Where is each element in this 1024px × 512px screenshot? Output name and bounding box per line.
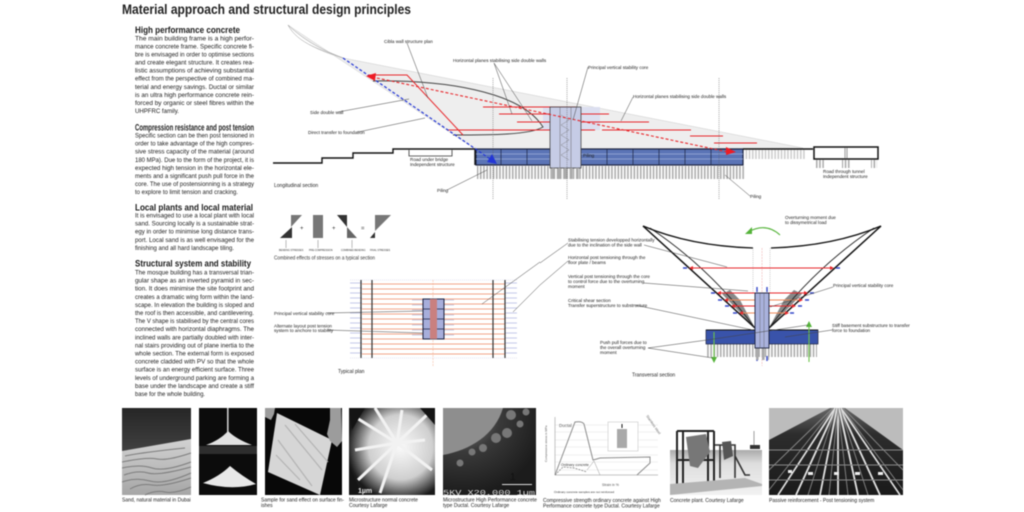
transversal labels: to control force due to the overturning bbox=[568, 279, 645, 284]
basement bbox=[476, 149, 743, 165]
red arrows bbox=[689, 266, 834, 315]
plan core bbox=[423, 299, 444, 339]
operators: + bbox=[332, 226, 336, 232]
bending stress diagram bbox=[280, 227, 292, 238]
photo: concrete plant bbox=[670, 408, 762, 495]
text block: local plants: sand. Sourcing locally is a sustainable strat- bbox=[135, 221, 254, 228]
heading: high performance concrete: High performance concrete bbox=[135, 25, 240, 35]
inner grey wall fill bbox=[722, 290, 802, 328]
orange post tension lines bbox=[362, 284, 505, 354]
transversal labels: Principal vertical stability core bbox=[833, 283, 894, 288]
ordinary curve bbox=[555, 467, 587, 475]
operators: + bbox=[300, 226, 304, 232]
text block: local plants: It is envisaged to use a local plant with local bbox=[135, 212, 254, 220]
plan labels: system to anchore to stability bbox=[274, 328, 334, 333]
caption: ductal: type Ductal. Courtesy Lafarge bbox=[443, 503, 509, 509]
blue tendons bbox=[350, 283, 517, 353]
caption: strength: Performance concrete type Ductal. Courtesy Lafarge bbox=[543, 504, 660, 510]
text block: high performance concrete: and create elegant structure. It creates rea- bbox=[135, 60, 254, 67]
caption: sand sample bbox=[261, 498, 344, 509]
text block: structural system: tion. It does minimise the site footprint and bbox=[135, 286, 255, 293]
transversal labels: moment bbox=[600, 350, 617, 355]
core bbox=[755, 293, 769, 348]
text block: compression resistance: expected high tension in the horizontal ele- bbox=[135, 165, 254, 172]
caption: normal concrete: Microstructure normal concrete bbox=[349, 498, 418, 504]
transversal labels: to dissymetrical load bbox=[785, 220, 827, 225]
text block: high performance concrete: listic assumptions of achieving substantial bbox=[135, 68, 254, 75]
text block: structural system: nal stairs providing out of plane inertia to the bbox=[135, 342, 254, 349]
chart: compressive strength: Ordinary concrete samples are not reinforced bbox=[554, 490, 615, 494]
labels: longitudinal section: Piling bbox=[750, 194, 762, 199]
title: Material approach and structural design principles bbox=[122, 1, 411, 17]
labels: longitudinal section: Side double wall bbox=[310, 110, 343, 115]
text block: structural system: connected with horizontal diaphragms. The bbox=[135, 326, 254, 333]
text block: structural system: gular shape as an inverted pyramid in sec- bbox=[135, 278, 254, 285]
text block: structural system: levels of underground parking are forming a bbox=[135, 375, 254, 382]
labels: longitudinal section: Cibla wall structure plan bbox=[384, 39, 433, 44]
red dashed force line bbox=[372, 77, 728, 152]
chart: compressive strength: Compressive stress in MPa bbox=[544, 425, 548, 462]
photo: ductal microstructure: 5KV X20,000 1µm bbox=[443, 490, 535, 498]
transversal labels: force to foundation bbox=[832, 328, 870, 333]
text block: structural system bbox=[134, 258, 255, 398]
tension lines bbox=[690, 268, 833, 306]
text block: structural system: scape. In elevation the building is sloped and bbox=[135, 302, 254, 309]
plan labels: Typical plan bbox=[338, 369, 365, 375]
text block: structural system: inclined walls are partially doubled with inter- bbox=[135, 334, 254, 341]
ductal curve bbox=[555, 422, 650, 475]
text block: compression resistance: core. The use of postensionning is a strategy bbox=[135, 181, 255, 188]
transversal labels: Push pull forces due to bbox=[600, 340, 647, 345]
text block: compression resistance: to explore to limit tension and cracking. bbox=[135, 189, 238, 196]
axes bbox=[555, 417, 658, 475]
chart inset bbox=[608, 422, 638, 451]
blue arrow head bbox=[487, 154, 497, 164]
text block: high performance concrete: is an ultra high performance concrete rein- bbox=[135, 92, 254, 99]
pre-compression diagram bbox=[313, 215, 323, 238]
caption: normal concrete bbox=[349, 498, 418, 509]
text block: structural system: surface is an energy efficient surface. Three bbox=[135, 367, 254, 374]
text block: compression resistance: ments and a significant push pull force in the bbox=[135, 173, 254, 180]
labels: longitudinal section: Piling bbox=[583, 153, 595, 158]
photo: sand cones bbox=[199, 408, 257, 495]
operators: = bbox=[361, 226, 365, 232]
transversal labels: Horizontal post tensioning through the bbox=[568, 255, 646, 260]
text block: local plants: egy in order to minimise long distance trans- bbox=[135, 229, 254, 236]
photo: ductal microstructure bbox=[443, 408, 536, 498]
caption: plant: Concrete plant. Courtesy Lafarge bbox=[670, 498, 744, 504]
caption: ductal bbox=[443, 498, 537, 509]
labels: longitudinal section: Principal vertical stability core bbox=[588, 65, 649, 70]
text block: structural system: concrete cladded with PV so that the whole bbox=[135, 359, 254, 366]
text block: local plants: finishing and all hard landscape tiling. bbox=[135, 245, 234, 252]
labels: longitudinal section: Horizontal planes stabilising side double walls bbox=[453, 58, 547, 63]
roof bbox=[643, 226, 881, 248]
transversal labels: Overturning moment due bbox=[785, 215, 836, 220]
dashed axes bbox=[753, 248, 770, 293]
plan labels: Alternate layout post tension bbox=[274, 324, 332, 328]
labels: longitudinal section: Independent structure bbox=[823, 174, 868, 179]
labels: longitudinal section: Road through tunnel bbox=[823, 169, 865, 174]
final stress diagram bbox=[375, 215, 391, 231]
transversal leaders bbox=[540, 243, 833, 358]
labels: longitudinal section: Independent structure bbox=[410, 162, 455, 167]
text block: local plants bbox=[135, 202, 254, 252]
text block: structural system: the roof is then accessible, and cantilevering. bbox=[135, 310, 254, 317]
heading: compression resistance and post tension: Compression resistance and post tension bbox=[135, 122, 254, 132]
chart: typical plan bbox=[274, 262, 540, 375]
text block: local plants: port. Local sand is as well envisaged for the bbox=[135, 237, 254, 244]
text block: compression resistance bbox=[135, 122, 255, 196]
caption: Combined effects of stresses on a typical section bbox=[274, 256, 375, 262]
plan labels: Principal vertical stability core bbox=[274, 311, 335, 316]
text block: high performance concrete: UHPFRC family. bbox=[135, 108, 179, 115]
piles bbox=[477, 166, 745, 179]
transversal labels: due to the inclination of the side wall bbox=[568, 242, 642, 248]
text block: high performance concrete: terial and energy savings. Ductal or similar bbox=[135, 84, 254, 91]
wing silhouette bbox=[288, 25, 803, 149]
side double wall curve bbox=[373, 81, 543, 135]
small stress labels: PRE-COMPRESSION bbox=[309, 249, 333, 252]
plan labels bbox=[274, 311, 365, 375]
labels: longitudinal section: Road under bridge bbox=[410, 157, 448, 162]
transversal labels: Vertical post tensioning through the core bbox=[568, 274, 650, 279]
text block: compression resistance: Specific section can be then post tensioned in bbox=[135, 132, 254, 140]
photo: normal concrete microstructure bbox=[349, 408, 435, 495]
text block: structural system: base for the whole building. bbox=[135, 391, 205, 398]
transversal labels: moment bbox=[568, 284, 585, 289]
chart: compressive strength: Strain in % bbox=[602, 483, 619, 487]
caption: ductal: Microstructure High Performance concrete bbox=[443, 498, 537, 504]
transversal labels: Transfer superstructure to substructure bbox=[568, 303, 648, 308]
tunnel bbox=[814, 147, 878, 159]
text block: structural system: The mosque building has a transversal trian- bbox=[135, 270, 254, 276]
road under bridge bbox=[409, 150, 452, 156]
plan leaders bbox=[327, 262, 540, 333]
caption: strength: Compressive strength ordinary concrete against High bbox=[543, 498, 661, 504]
chart: longitudinal section bbox=[273, 25, 878, 200]
labels: longitudinal section: Horizontal planes stabilising side double walls bbox=[633, 94, 727, 99]
photo: sand dunes bbox=[122, 408, 191, 495]
core wall band bbox=[543, 107, 600, 130]
transversal labels: Transversal section bbox=[632, 372, 675, 378]
small arrows bbox=[286, 240, 352, 248]
small stress labels: BENDING STRESSES bbox=[279, 249, 304, 252]
chart: compressive strength: Stainless steel bbox=[645, 414, 662, 435]
transversal labels: Stabilising tension developped horizontally bbox=[568, 238, 655, 242]
core bbox=[550, 107, 581, 168]
photo: sand effect sample bbox=[265, 408, 342, 495]
outer walls bbox=[361, 280, 505, 358]
transversal labels bbox=[568, 215, 910, 378]
heading: local plants and local material: Local plants and local material bbox=[135, 202, 253, 212]
text block: high performance concrete bbox=[135, 25, 255, 115]
text block: high performance concrete: The main building frame is a high perfor- bbox=[135, 36, 254, 42]
dotted outline bbox=[350, 280, 517, 358]
caption: strength bbox=[543, 498, 661, 510]
red arrow heads bbox=[366, 73, 736, 155]
chart labels: Ductal bbox=[559, 423, 572, 428]
photo: normal concrete microstructure: 1µm bbox=[358, 488, 372, 495]
text block: high performance concrete: bre is envisaged in order to optimise sections bbox=[135, 52, 254, 59]
labels: longitudinal section: Direct transfer to foundation bbox=[308, 130, 365, 135]
small stress labels: COMBINED BENDING bbox=[341, 249, 366, 252]
dashed grid lines bbox=[493, 78, 719, 200]
operators bbox=[300, 226, 365, 232]
labels: longitudinal section: Piling bbox=[437, 188, 449, 193]
transversal labels: the overall overturning bbox=[600, 345, 646, 350]
text block: structural system: base under the landscape and create a stiff bbox=[135, 383, 254, 390]
V walls bbox=[643, 226, 881, 328]
text block: compression resistance: 180 MPa). Due to the form of the project, it is bbox=[135, 157, 254, 164]
grid bbox=[555, 425, 658, 470]
transversal labels: floor plate / beams bbox=[568, 260, 606, 265]
photo: ductal microstructure: 1 bbox=[510, 472, 516, 483]
text block: structural system: The V shape is stabilised by the central cores bbox=[135, 318, 254, 325]
blue dashed load line bbox=[343, 58, 493, 161]
text block: high performance concrete: effect from the perspective of combined ma- bbox=[135, 76, 254, 83]
caption: normal concrete: Courtesy Lafarge bbox=[349, 503, 388, 509]
green moment arrow bbox=[748, 228, 780, 235]
basement bbox=[706, 330, 818, 344]
chart: combined stresses diagrams bbox=[274, 215, 391, 262]
transversal labels: Critical shear section bbox=[568, 298, 611, 303]
text block: high performance concrete: mance concrete frame. Specific concrete fi- bbox=[135, 44, 254, 50]
heading: structural system and stability: Structural system and stability bbox=[135, 258, 251, 268]
transversal labels: Stiff basement substructure to transfer bbox=[832, 323, 910, 328]
text block: compression resistance: order to take advantage of the high compres- bbox=[135, 141, 254, 148]
text block: structural system: whole section. The external form is exposed bbox=[134, 350, 254, 358]
caption: reinforcement: Passive reinforcement - Post tensioning system bbox=[769, 498, 874, 504]
labels: longitudinal section: Longitudinal section bbox=[274, 183, 318, 189]
photo: reinforcement bbox=[769, 408, 903, 495]
small stress labels bbox=[279, 249, 391, 252]
caption: sand: Sand, natural material in Dubai bbox=[122, 498, 191, 504]
small stress labels: FINAL STRESSES bbox=[370, 249, 391, 252]
chart: compressive strength bbox=[544, 414, 662, 494]
chart: compressive strength: Ordinary concrete bbox=[561, 463, 589, 467]
solid red tension lines bbox=[368, 75, 757, 143]
blue arrows bbox=[683, 268, 840, 313]
green push pull arrows bbox=[714, 324, 809, 362]
text block: high performance concrete: forced by organic or steel fibres within the bbox=[135, 100, 255, 107]
leader lines bbox=[338, 43, 750, 196]
combined bending diagram bbox=[337, 215, 347, 227]
labels: longitudinal section bbox=[274, 39, 868, 199]
chart: transversal section bbox=[540, 215, 910, 378]
piles bbox=[706, 344, 817, 357]
core tendons bbox=[412, 300, 454, 335]
caption: sand sample: ishes bbox=[261, 503, 273, 509]
text block: compression resistance: sive stress capacity of the material (around bbox=[135, 149, 254, 156]
caption: sand sample: Sample for sand effect on surface fin- bbox=[261, 498, 344, 504]
ground line bbox=[273, 149, 813, 165]
text block: structural system: creates a dramatic wing form within the land- bbox=[135, 294, 254, 301]
